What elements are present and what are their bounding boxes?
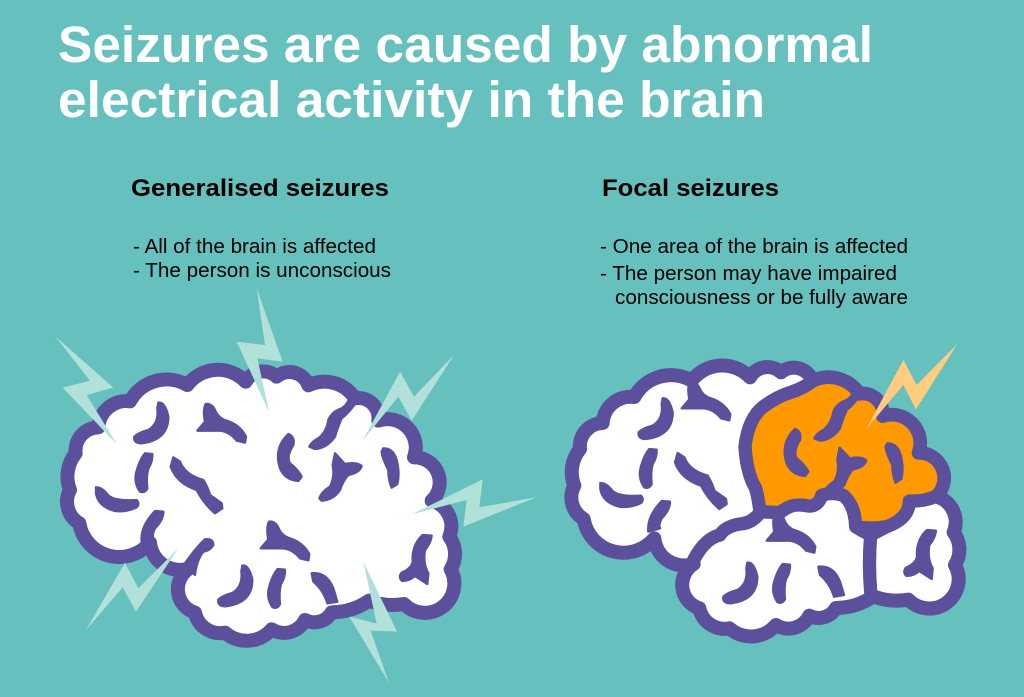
brain outline	[67, 370, 455, 641]
text block: generalised description	[133, 236, 391, 282]
text block: generalised description: - All of the brain is affected	[133, 236, 376, 258]
brain folds	[96, 401, 432, 608]
lightning bolts	[55, 288, 536, 683]
title	[58, 16, 873, 128]
text block: focal description: - One area of the brain is affected	[600, 236, 908, 258]
brain: focal seizure	[571, 344, 959, 636]
text block: focal description: - The person may have impaired	[600, 263, 897, 285]
text block: generalised description: - The person is unconscious	[133, 260, 391, 282]
brain folds	[600, 382, 936, 603]
brain: generalised seizure	[55, 288, 536, 683]
text block: focal description: consciousness or be fully aware	[615, 287, 908, 309]
orange affected lobe	[745, 377, 944, 528]
lightning bolt	[866, 344, 957, 429]
brain outline	[571, 365, 959, 636]
title: electrical activity in the brain	[58, 71, 765, 128]
text block: focal description	[600, 236, 908, 309]
title: Seizures are caused by abnormal	[58, 16, 873, 73]
heading: generalised seizures: Generalised seizures	[131, 175, 389, 202]
lobe dividers	[694, 513, 887, 592]
heading: focal seizures: Focal seizures	[602, 175, 779, 202]
